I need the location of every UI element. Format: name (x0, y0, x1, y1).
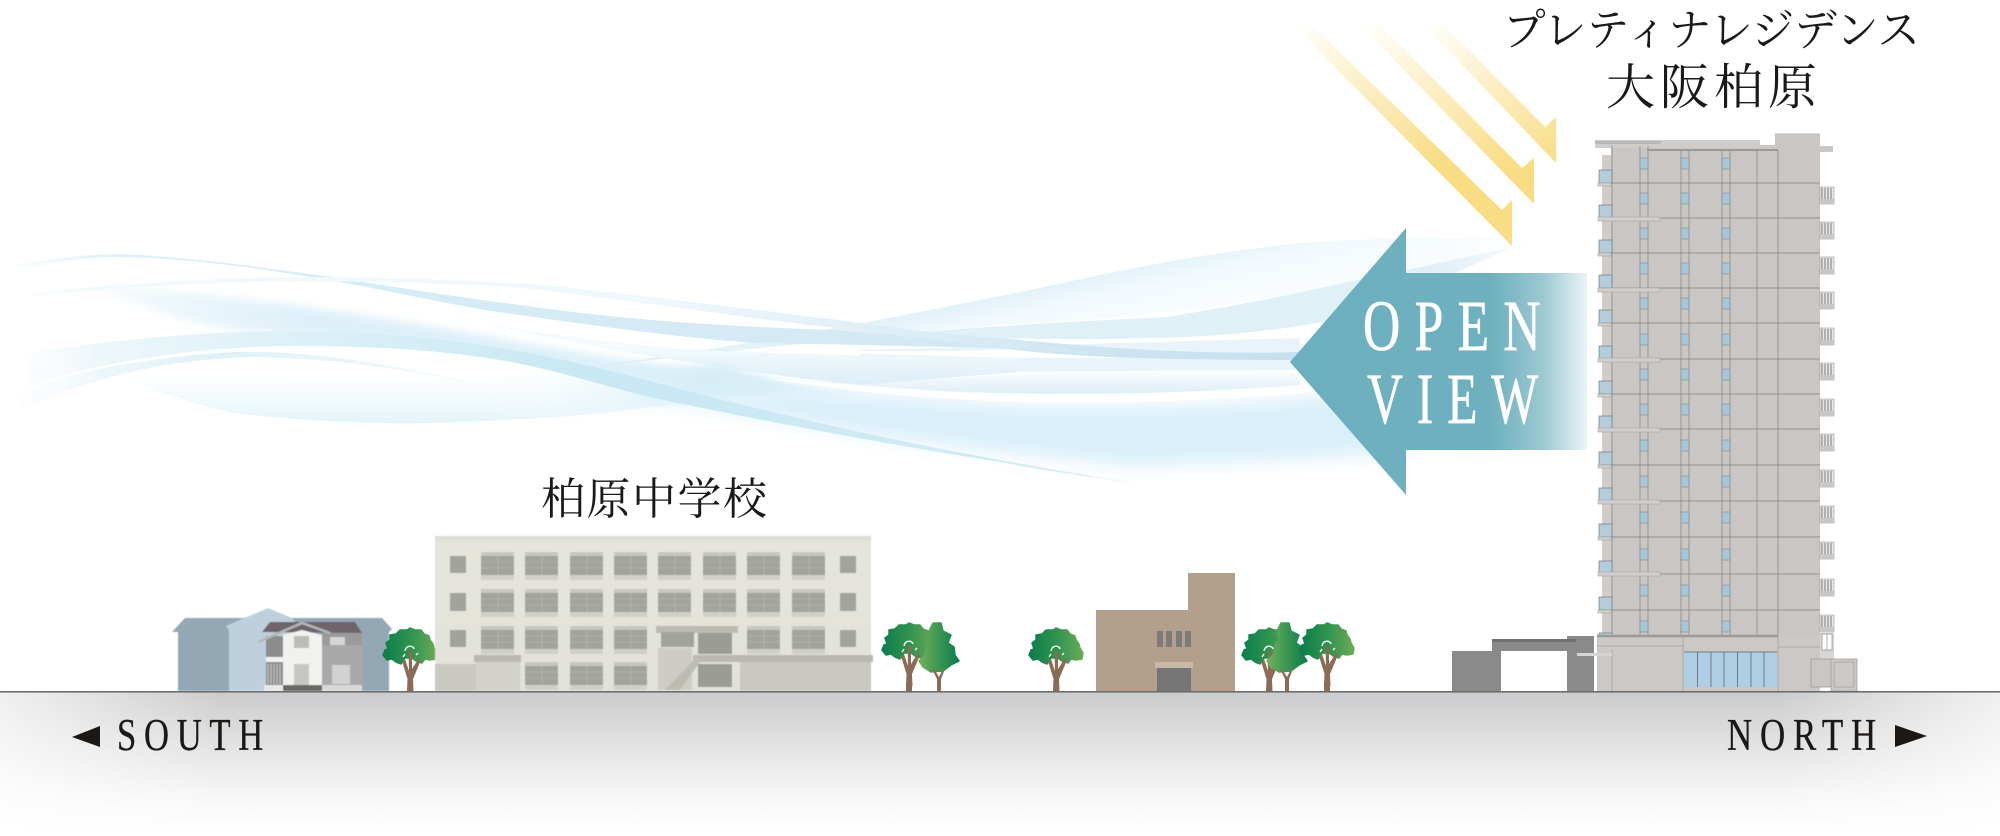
front house (258, 622, 362, 691)
ray 2 (1358, 23, 1534, 204)
south marker: SOUTH (117, 710, 271, 760)
glass shopfront (1684, 652, 1777, 687)
tree beside houses (383, 628, 437, 691)
left slabs (1598, 183, 1660, 613)
residence tower (1577, 134, 1857, 691)
south marker (72, 710, 271, 760)
school side windows (450, 556, 856, 647)
floors (1599, 158, 1820, 646)
podium (1577, 633, 1857, 691)
slit windows (1157, 631, 1191, 647)
trees group 2 (1242, 623, 1354, 691)
gate structure (1452, 636, 1594, 691)
school windows row 3 (481, 626, 825, 654)
school base blocks (435, 626, 873, 691)
OPEN label: OPEN (1363, 286, 1555, 366)
residence name (1503, 6, 1920, 115)
balconies (1820, 187, 1834, 632)
ground band (0, 692, 2000, 836)
school label: 柏原中学校 (541, 475, 768, 524)
north marker: NORTH (1727, 710, 1884, 760)
school building (435, 536, 873, 691)
VIEW label: VIEW (1367, 359, 1552, 439)
annex box (1811, 659, 1857, 691)
sunlight rays (1291, 23, 1556, 246)
tower body (1595, 134, 1833, 637)
ground line (0, 691, 2000, 693)
back house (172, 618, 392, 691)
wind waves (17, 237, 1540, 484)
school windows row 4 (525, 662, 647, 690)
ray 1 (1291, 23, 1512, 246)
trees group 1 (882, 623, 959, 691)
ray 3 (1422, 23, 1556, 163)
open view arrow (1290, 228, 1587, 495)
tree single (1029, 628, 1083, 691)
middle house (226, 608, 300, 691)
entrance (1155, 662, 1193, 691)
residence name: 大阪柏原 (1606, 60, 1817, 115)
tan building (1096, 573, 1235, 691)
school windows row 2 (481, 589, 825, 617)
residence name: プレティナレジデンス (1503, 6, 1920, 55)
houses (172, 608, 392, 691)
vertical structure lines (1612, 145, 1778, 636)
school windows row 1 (481, 552, 825, 580)
